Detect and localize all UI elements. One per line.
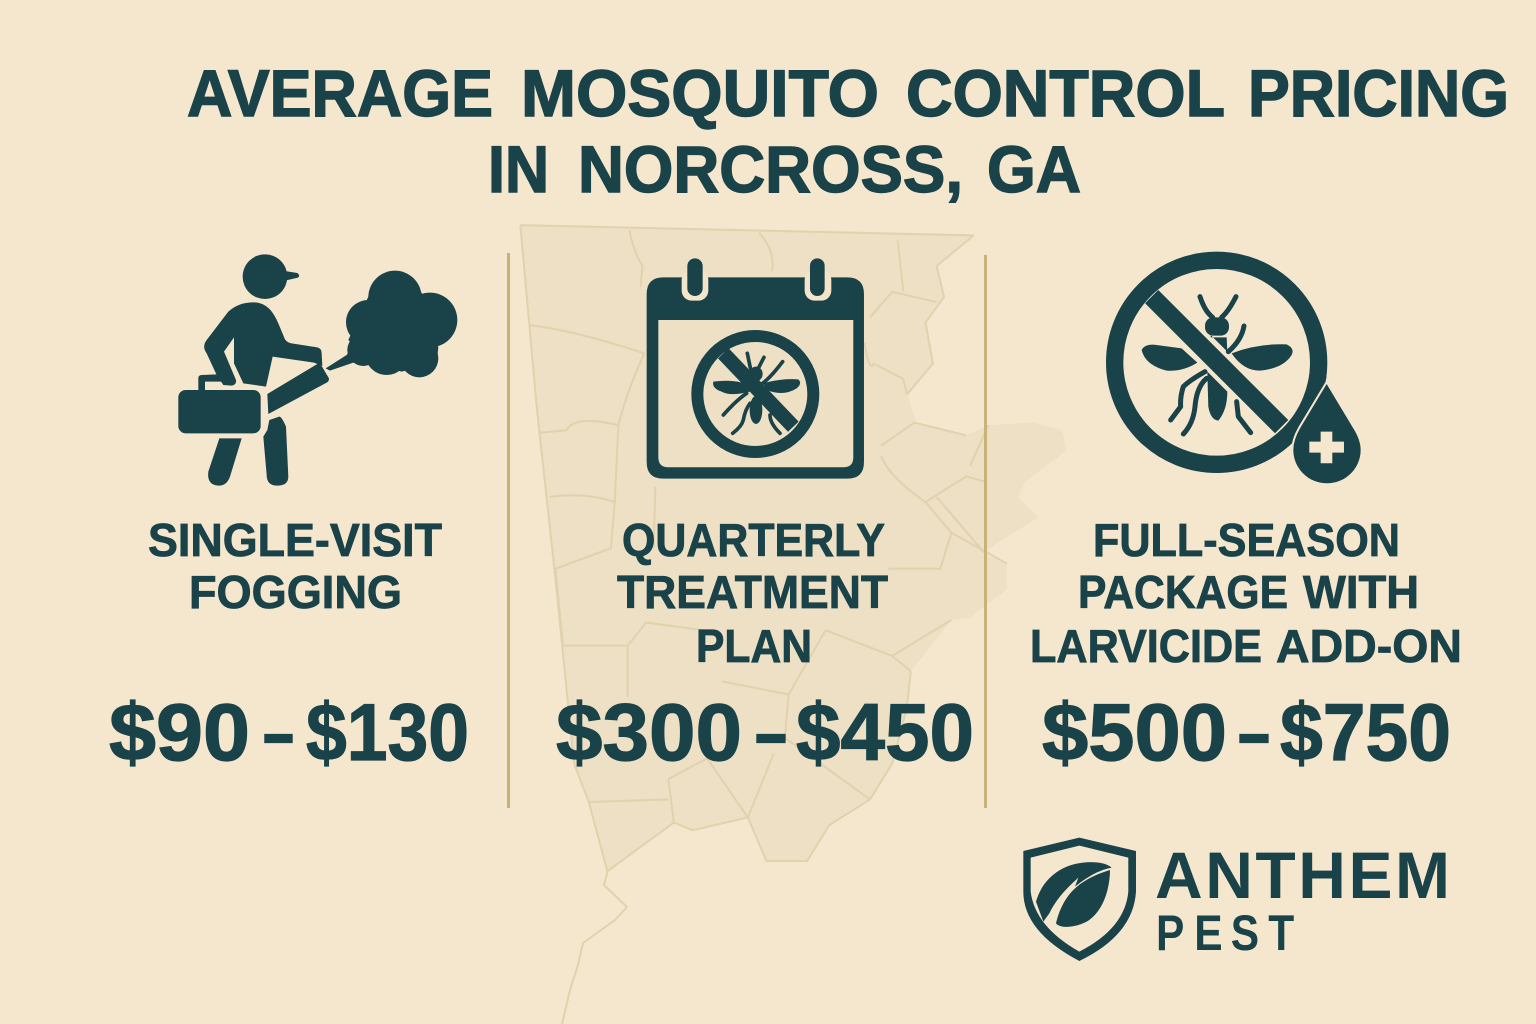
icon: technician with fogger <box>178 254 457 486</box>
label: full-season package: FULL-SEASON <box>1093 514 1400 566</box>
label: full-season package: LARVICIDE <box>1030 620 1262 672</box>
wordmark: ANTHEM <box>1155 838 1450 912</box>
label: quarterly treatment plan: QUARTERLY <box>622 514 885 566</box>
price: quarterly treatment plan: – <box>755 688 787 778</box>
panel: quarterly treatment plan <box>556 258 974 778</box>
label: single-visit fogging <box>148 514 442 618</box>
label: full-season package: PACKAGE <box>1078 566 1288 618</box>
label: full-season package <box>1030 514 1462 672</box>
price: single-visit fogging: $90 <box>109 688 250 778</box>
price: full-season package: $750 <box>1280 688 1451 778</box>
title: PRICING <box>1248 56 1509 130</box>
icon: calendar with no-mosquito symbol <box>647 258 864 479</box>
price: quarterly treatment plan: $450 <box>796 688 974 778</box>
label: single-visit fogging: SINGLE-VISIT <box>148 514 442 566</box>
title <box>187 56 1509 206</box>
background map of Georgia <box>520 225 1066 1024</box>
label: single-visit fogging: FOGGING <box>189 566 402 618</box>
panel: single-visit fogging <box>109 254 469 778</box>
logo: Anthem Pest <box>1023 838 1450 961</box>
icon: no-mosquito symbol with larvicide drop <box>1115 260 1361 483</box>
price: quarterly treatment plan <box>556 688 974 778</box>
column dividers <box>507 253 987 808</box>
label: full-season package: ADD-ON <box>1276 620 1462 672</box>
title: GA <box>987 132 1081 206</box>
label: full-season package: WITH <box>1303 566 1419 618</box>
title: AVERAGE <box>187 56 493 130</box>
price: quarterly treatment plan: $300 <box>556 688 742 778</box>
label: quarterly treatment plan: TREATMENT <box>617 566 888 618</box>
price: full-season package: $500 <box>1042 688 1227 778</box>
title: MOSQUITO <box>521 56 879 130</box>
price: single-visit fogging <box>109 688 469 778</box>
title: CONTROL <box>906 56 1225 130</box>
title: IN <box>488 132 549 206</box>
icon: shield with leaf <box>1023 838 1136 961</box>
price: single-visit fogging: $130 <box>306 688 469 778</box>
panel: full-season package <box>1030 260 1462 778</box>
price: full-season package <box>1042 688 1451 778</box>
wordmark: PEST <box>1156 905 1294 961</box>
price: full-season package: – <box>1238 688 1270 778</box>
label: quarterly treatment plan: PLAN <box>696 620 812 672</box>
wordmark <box>1155 838 1450 961</box>
label: quarterly treatment plan <box>617 514 888 672</box>
title: NORCROSS, <box>578 132 963 206</box>
price: single-visit fogging: – <box>263 688 294 778</box>
